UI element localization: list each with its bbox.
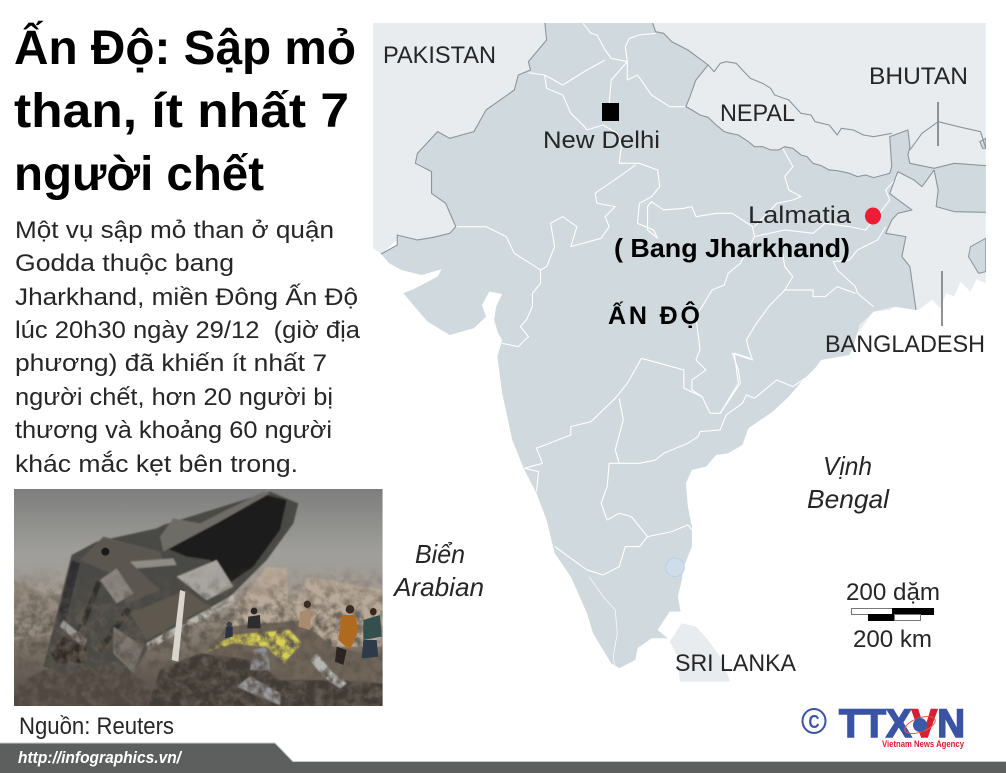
label: Bhutan: BHUTAN [869, 63, 968, 90]
label: Lalmatia: Lalmatia [748, 202, 852, 229]
label: Pakistan: PAKISTAN [383, 42, 496, 69]
body text: người chết, hơn 20 người bị [15, 384, 333, 411]
label: Arabian Sea: Arabian [392, 572, 484, 602]
label: Jharkhand state: ( Bang Jharkhand) [614, 233, 850, 263]
state borders [456, 23, 898, 668]
Pulicat lake [666, 558, 684, 577]
title: than, ít nhất 7 [14, 85, 349, 138]
label: Bay of Bengal: Bengal [807, 484, 890, 514]
India landmass [381, 20, 986, 668]
body text: lúc 20h30 ngày 29/12 (giờ địa [15, 317, 361, 344]
leader line: Bhutan [937, 102, 939, 146]
leader line: Bangladesh [941, 271, 943, 326]
label: India: ẤN ĐỘ [608, 300, 700, 330]
people on the rubble [225, 601, 382, 665]
title: Ấn Độ: Sập mỏ [14, 21, 356, 75]
label: Arabian Sea [392, 539, 484, 602]
footer band [0, 743, 1006, 773]
neighbouring countries land [373, 20, 986, 333]
label: New Delhi: New Delhi [543, 127, 660, 154]
marker: Lalmatia mine site [865, 208, 881, 224]
logo: TTXVN: Vietnam News Agency [882, 739, 964, 749]
label: Bangladesh: BANGLADESH [825, 331, 985, 358]
label: Nepal: NEPAL [720, 100, 795, 127]
logo: TTXVN: TTXVN [839, 702, 965, 746]
title [14, 21, 356, 201]
Tripura and Arunachal fragments [968, 138, 986, 273]
marker: New Delhi [602, 103, 619, 121]
Sri Lanka [670, 623, 730, 682]
label: Bay of Bengal: Vịnh [823, 451, 872, 481]
country borders [381, 20, 986, 310]
body text: Một vụ sập mỏ than ở quận [15, 217, 334, 244]
body text: phương) đã khiến ít nhất 7 [15, 350, 327, 377]
label: Sri Lanka: SRI LANKA [675, 650, 796, 677]
label: Bay of Bengal [807, 451, 890, 514]
title: người chết [14, 148, 264, 201]
label: Arabian Sea: Biển [415, 539, 465, 569]
body text: Jharkhand, miền Đông Ấn Độ [15, 283, 358, 311]
body text: thương và khoảng 60 người [15, 417, 332, 444]
body text: khác mắc kẹt bên trong. [15, 451, 298, 478]
map of India [373, 20, 986, 682]
scale bar [846, 579, 940, 653]
photo: collapsed mine machinery [14, 489, 383, 706]
body text [15, 217, 361, 478]
footer URL: http://infographics.vn/ [18, 748, 183, 767]
body text: Godda thuộc bang [15, 250, 234, 277]
scale bar: 200 km [853, 626, 932, 653]
logo: TTXVN: C [808, 712, 820, 732]
source credit: Nguồn: Reuters [19, 713, 174, 740]
scale bar: 200 dặm [846, 579, 940, 606]
